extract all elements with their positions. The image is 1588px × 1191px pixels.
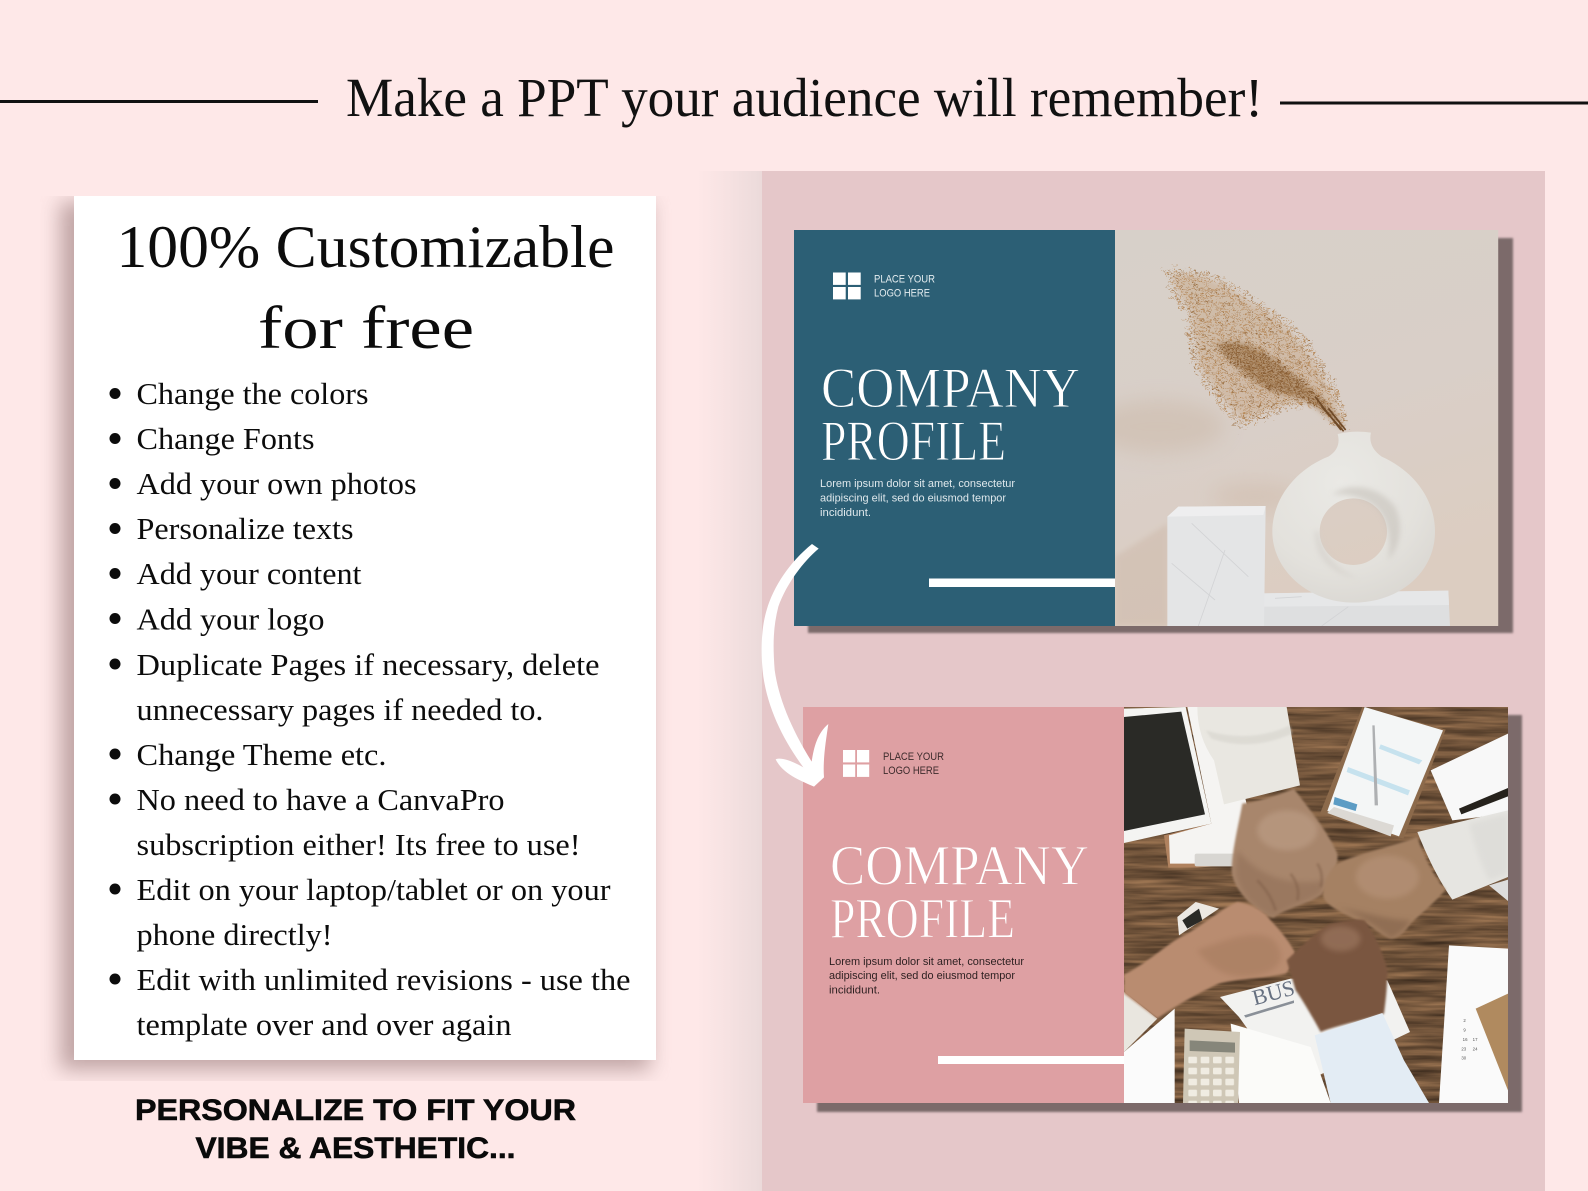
- slide body text: adipiscing elit, sed do eiusmod tempor: [829, 970, 1015, 982]
- tablet: [1124, 707, 1211, 843]
- slide body text: Lorem ipsum dolor sit amet, consectetur: [829, 956, 1024, 968]
- right sleeve: [1417, 810, 1508, 900]
- calculator: [1183, 1029, 1240, 1103]
- lower-right fist: [1287, 920, 1387, 1032]
- logo text: [883, 751, 944, 777]
- card heading: for free: [258, 295, 474, 361]
- feature list: phone directly!: [136, 917, 332, 952]
- desk items: 17: [1473, 1037, 1478, 1042]
- top-left fist: [1232, 789, 1338, 918]
- title with side rules: Make a PPT your audience will remember!: [346, 67, 1263, 128]
- calendar and envelope: [1439, 945, 1508, 1103]
- desk items: 16: [1463, 1037, 1468, 1042]
- slide heading: COMPANY: [821, 357, 1080, 420]
- slide body text: incididunt.: [820, 507, 871, 519]
- feature list: Edit on your laptop/tablet or on your: [136, 872, 611, 907]
- top sleeve: [1197, 707, 1300, 804]
- feature list: Add your content: [136, 556, 362, 591]
- clipboard with plan: [1164, 824, 1214, 868]
- slide body text: Lorem ipsum dolor sit amet, consectetur: [820, 478, 1015, 490]
- feature list: No need to have a CanvaPro: [136, 782, 504, 817]
- newspaper: [1220, 978, 1410, 1074]
- panel: customization card: [60, 196, 656, 1070]
- photo: vase and pampas grass: [1092, 230, 1498, 626]
- lower-left fist: [1124, 902, 1296, 1019]
- invoice clipboard: [1320, 707, 1446, 839]
- feature list: Change the colors: [136, 376, 368, 411]
- feature list: subscription either! Its free to use!: [136, 827, 580, 862]
- slide body text: [829, 956, 1024, 996]
- white sheets: [1124, 1009, 1175, 1103]
- desk items: 30: [1461, 1056, 1467, 1061]
- feature list: Edit with unlimited revisions - use the: [136, 962, 630, 997]
- slide body text: [820, 478, 1015, 519]
- feature list: unnecessary pages if needed to.: [136, 692, 544, 727]
- feature list: Change Fonts: [136, 421, 314, 456]
- feature list: template over and over again: [136, 1007, 512, 1042]
- title with side rules: [0, 67, 1588, 128]
- desk items: BUS: [1249, 975, 1297, 1010]
- top-right fist: [1323, 837, 1446, 939]
- panel: slide previews background: [696, 171, 1545, 1191]
- slide body text: adipiscing elit, sed do eiusmod tempor: [820, 492, 1006, 504]
- slide: pink company profile: [803, 707, 1522, 1112]
- logo text: LOGO HERE: [883, 765, 939, 777]
- icon: logo placeholder: [843, 750, 869, 777]
- caption: [135, 1094, 576, 1165]
- caption: PERSONALIZE TO FIT YOUR: [135, 1094, 576, 1127]
- lower-right sleeve: [1315, 1013, 1429, 1103]
- feature list: Change Theme etc.: [136, 737, 386, 772]
- feature list: Duplicate Pages if necessary, delete: [136, 647, 600, 682]
- desk items: 24: [1473, 1046, 1478, 1051]
- photo: four fists on a desk: [1124, 707, 1508, 1103]
- slide heading: PROFILE: [821, 410, 1006, 473]
- slide: teal company profile: [794, 230, 1513, 633]
- pampas plume: [1162, 268, 1347, 431]
- logo text: LOGO HERE: [874, 288, 930, 300]
- slide heading: [821, 357, 1080, 473]
- ceramic vase: [1272, 432, 1435, 603]
- desk items: [1124, 707, 1508, 1103]
- desk items: 2: [1463, 1018, 1466, 1023]
- laptop: [1431, 734, 1508, 820]
- feature list: Personalize texts: [136, 511, 354, 546]
- logo text: PLACE YOUR: [883, 751, 944, 763]
- marble blocks: [1167, 506, 1450, 626]
- slide body text: incididunt.: [829, 984, 880, 996]
- feature list: [110, 376, 630, 1042]
- slide heading: COMPANY: [830, 834, 1089, 898]
- logo text: PLACE YOUR: [874, 274, 935, 286]
- slide heading: [830, 834, 1089, 950]
- icon: logo placeholder: [833, 272, 861, 299]
- left sleeve: [1124, 992, 1157, 1052]
- feature list: Add your own photos: [136, 466, 416, 501]
- arrow: teal slide to pink slide: [762, 544, 828, 787]
- plant: [1177, 902, 1219, 935]
- slide heading: PROFILE: [830, 888, 1015, 950]
- caption: VIBE & AESTHETIC...: [196, 1132, 516, 1165]
- card heading: 100% Customizable: [116, 214, 614, 280]
- desk items: 23: [1461, 1046, 1467, 1051]
- card heading: [116, 214, 614, 361]
- feature list: Add your logo: [136, 602, 324, 636]
- logo text: [874, 274, 935, 300]
- desk items: 9: [1463, 1027, 1466, 1032]
